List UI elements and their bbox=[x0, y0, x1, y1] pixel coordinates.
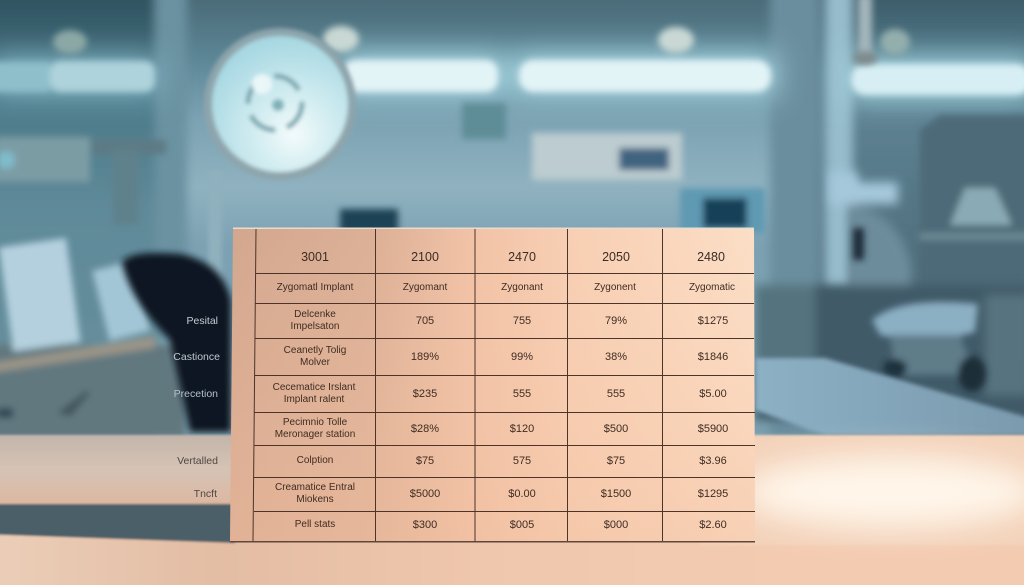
row 8: $5000 bbox=[410, 488, 440, 500]
row 9 bbox=[295, 519, 727, 531]
row 5: Cecematice Irslant bbox=[273, 382, 355, 393]
row 8: Miokens bbox=[296, 494, 334, 505]
row 4: $1846 bbox=[698, 351, 728, 363]
row 7: $75 bbox=[416, 455, 434, 467]
row 4: 99% bbox=[511, 351, 533, 363]
header row bbox=[301, 250, 725, 264]
row 7: $3.96 bbox=[699, 455, 727, 467]
row 6: $120 bbox=[510, 423, 534, 435]
row 6 bbox=[275, 417, 728, 440]
row 6: $5900 bbox=[698, 423, 728, 435]
row 4: 38% bbox=[605, 351, 627, 363]
row 8: $0.00 bbox=[508, 488, 536, 500]
row 6: Pecimnio Tolle bbox=[283, 417, 347, 428]
row: Zygomatic names: Zygonant bbox=[501, 282, 543, 293]
header row: 2050 bbox=[602, 250, 630, 264]
row: Zygomatic names: Zygomatic bbox=[689, 282, 735, 293]
side labels: Tncft bbox=[194, 488, 217, 500]
row 6: $500 bbox=[604, 423, 628, 435]
ceiling lights bbox=[0, 26, 1024, 101]
header row: 2470 bbox=[508, 250, 536, 264]
row 5: 555 bbox=[513, 388, 531, 400]
row 8 bbox=[275, 482, 728, 505]
side labels bbox=[173, 315, 220, 500]
header row: 3001 bbox=[301, 250, 329, 264]
desk bbox=[0, 435, 1024, 585]
row 8: $1500 bbox=[601, 488, 631, 500]
row 7: Colption bbox=[297, 455, 333, 466]
row 8: $1295 bbox=[698, 488, 728, 500]
row 3: 705 bbox=[416, 315, 434, 327]
row: Zygomatic names: Zygonent bbox=[594, 282, 636, 293]
row 9: Pell stats bbox=[295, 519, 335, 530]
row 8: Creamatice Entral bbox=[275, 482, 355, 493]
row 3: 79% bbox=[605, 315, 627, 327]
right equipment bbox=[755, 172, 1024, 420]
row 9: $300 bbox=[413, 519, 437, 531]
row 4: 189% bbox=[411, 351, 439, 363]
equipment details bbox=[853, 228, 986, 392]
side labels: Precetion bbox=[174, 388, 218, 400]
row 5: Implant ralent bbox=[284, 394, 344, 405]
row 4 bbox=[284, 345, 728, 368]
row: Zygomatic names: Zygomatl Implant bbox=[277, 282, 353, 293]
row 7: 575 bbox=[513, 455, 531, 467]
row 6: $28% bbox=[411, 423, 439, 435]
row 3: 755 bbox=[513, 315, 531, 327]
side labels: Vertalled bbox=[177, 455, 218, 467]
row 4: Ceanetly Tolig bbox=[284, 345, 346, 356]
row 5: $5.00 bbox=[699, 388, 727, 400]
row 5 bbox=[273, 382, 727, 405]
row 3: Impelsaton bbox=[291, 321, 339, 332]
row: Zygomatic names: Zygomant bbox=[403, 282, 447, 293]
row 9: $000 bbox=[604, 519, 628, 531]
row 3: $1275 bbox=[698, 315, 728, 327]
side labels: Castionce bbox=[173, 351, 220, 363]
wall fixtures bbox=[0, 0, 1024, 300]
row 3: Delcenke bbox=[294, 309, 336, 320]
left shelf, books and chair bbox=[0, 238, 231, 437]
row 3 bbox=[291, 309, 728, 332]
surgical lamp bbox=[204, 28, 356, 280]
row: Zygomatic names bbox=[276, 282, 735, 293]
row 5: 555 bbox=[607, 388, 625, 400]
header row: 2100 bbox=[411, 250, 439, 264]
side table bbox=[755, 358, 1024, 436]
row 9: $2.60 bbox=[699, 519, 727, 531]
header row: 2480 bbox=[697, 250, 725, 264]
row 7: $75 bbox=[607, 455, 625, 467]
row 4: Molver bbox=[300, 357, 330, 368]
row 9: $005 bbox=[510, 519, 534, 531]
row 7 bbox=[297, 455, 727, 467]
row 5: $235 bbox=[413, 388, 437, 400]
row 6: Meronager station bbox=[275, 429, 355, 440]
side labels: Pesital bbox=[186, 315, 218, 327]
